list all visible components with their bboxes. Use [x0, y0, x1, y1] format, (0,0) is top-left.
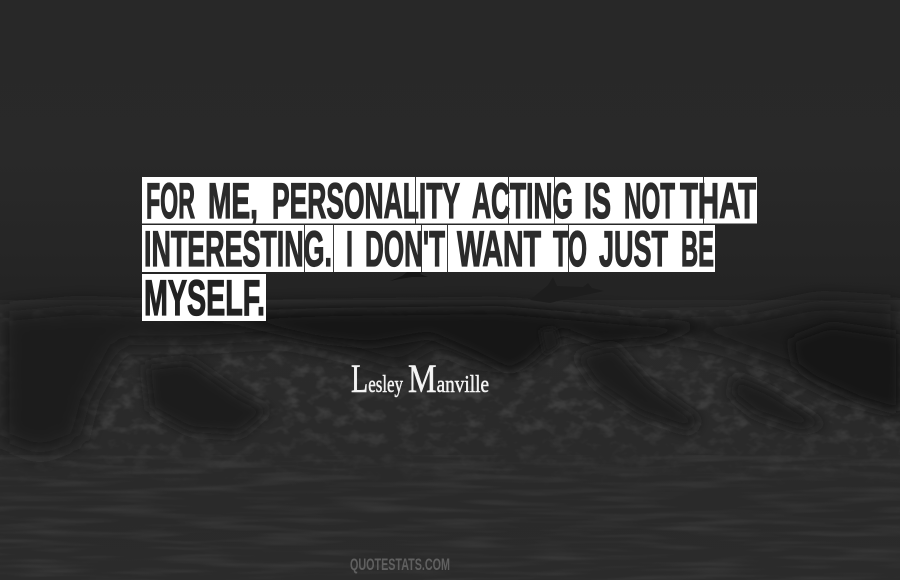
quote highlighted line 1: ME,	[208, 173, 258, 229]
quote highlighted line 2	[142, 221, 715, 277]
quote highlighted line 1	[142, 173, 757, 229]
quote highlighted line 3	[142, 270, 266, 326]
author name: Lesley	[351, 356, 403, 401]
quote highlighted line 1: IS	[584, 173, 611, 229]
dolphin silhouette	[530, 277, 604, 303]
background: ocean wave	[0, 300, 900, 580]
quote highlighted line 2: WANT	[457, 221, 541, 277]
quote highlighted line 2: I	[346, 221, 353, 277]
quote poster: BE	[681, 221, 714, 277]
quote highlighted line 1: THAT	[680, 173, 756, 229]
quote highlighted line 1: ACTING	[472, 173, 573, 229]
bird silhouette	[390, 268, 428, 281]
quote highlighted line 2: JUST	[599, 221, 668, 277]
author name: Manville	[408, 356, 489, 401]
quote highlighted line 1: FOR	[146, 173, 195, 229]
quote highlighted line 3: MYSELF.	[144, 270, 265, 326]
quote highlighted line 1: NOT	[624, 173, 675, 229]
quote highlighted line 1: PERSONALITY	[272, 173, 460, 229]
quote highlighted line 2: DON'T	[365, 221, 445, 277]
author name	[351, 356, 489, 401]
quote highlighted line 2: INTERESTING.	[144, 221, 332, 277]
watermark: QUOTESTATS.COM	[350, 555, 450, 574]
quote highlighted line 2: TO	[553, 221, 587, 277]
background: sky	[0, 0, 900, 320]
quote poster	[0, 177, 900, 580]
